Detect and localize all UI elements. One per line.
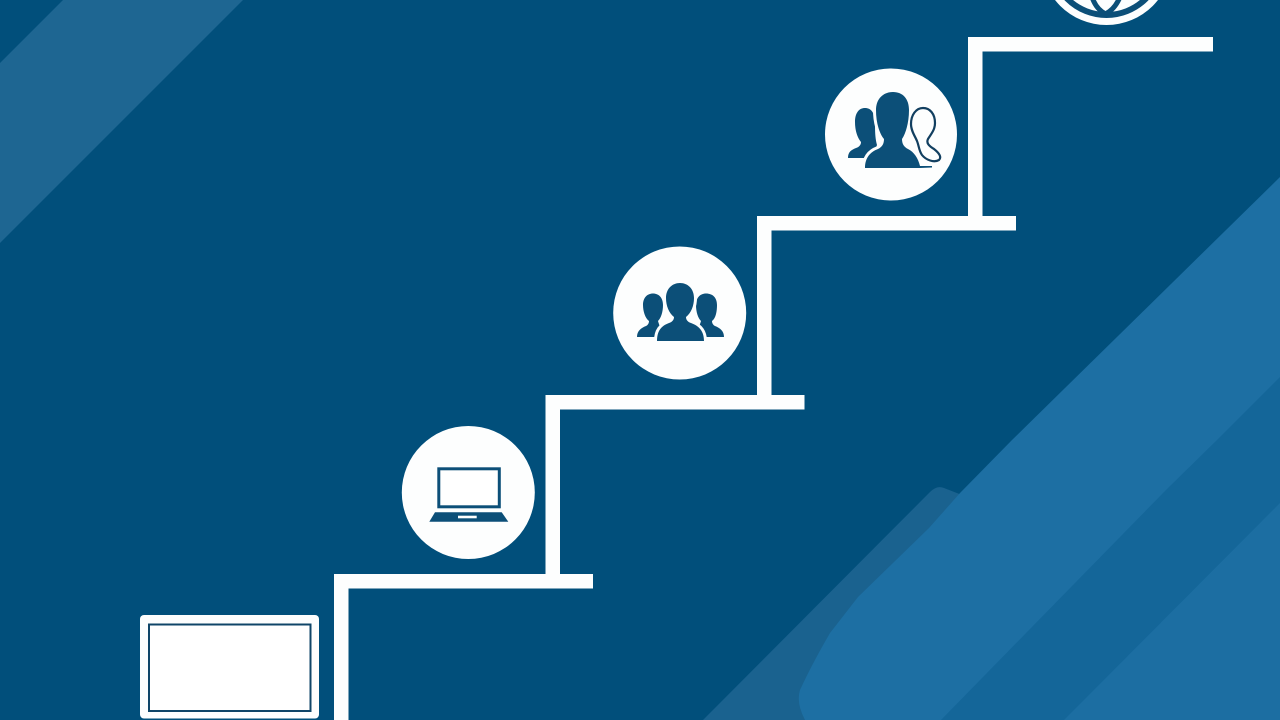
background stripe: top left [0,0,243,243]
background shapes: bottom right [703,177,1280,720]
icon: laptop in circle [402,426,535,559]
icon: group of three people in circle [613,246,746,380]
icon: people with outlined figure in circle [825,68,957,200]
darker right-hand base [940,370,1280,720]
icon: blank screen panel [140,615,319,718]
light main band [799,177,1280,720]
staircase line [334,37,1213,720]
light corner band [1064,503,1280,720]
muted back stripe [703,487,962,720]
icon: globe in circle, cropped at top [1041,0,1172,25]
